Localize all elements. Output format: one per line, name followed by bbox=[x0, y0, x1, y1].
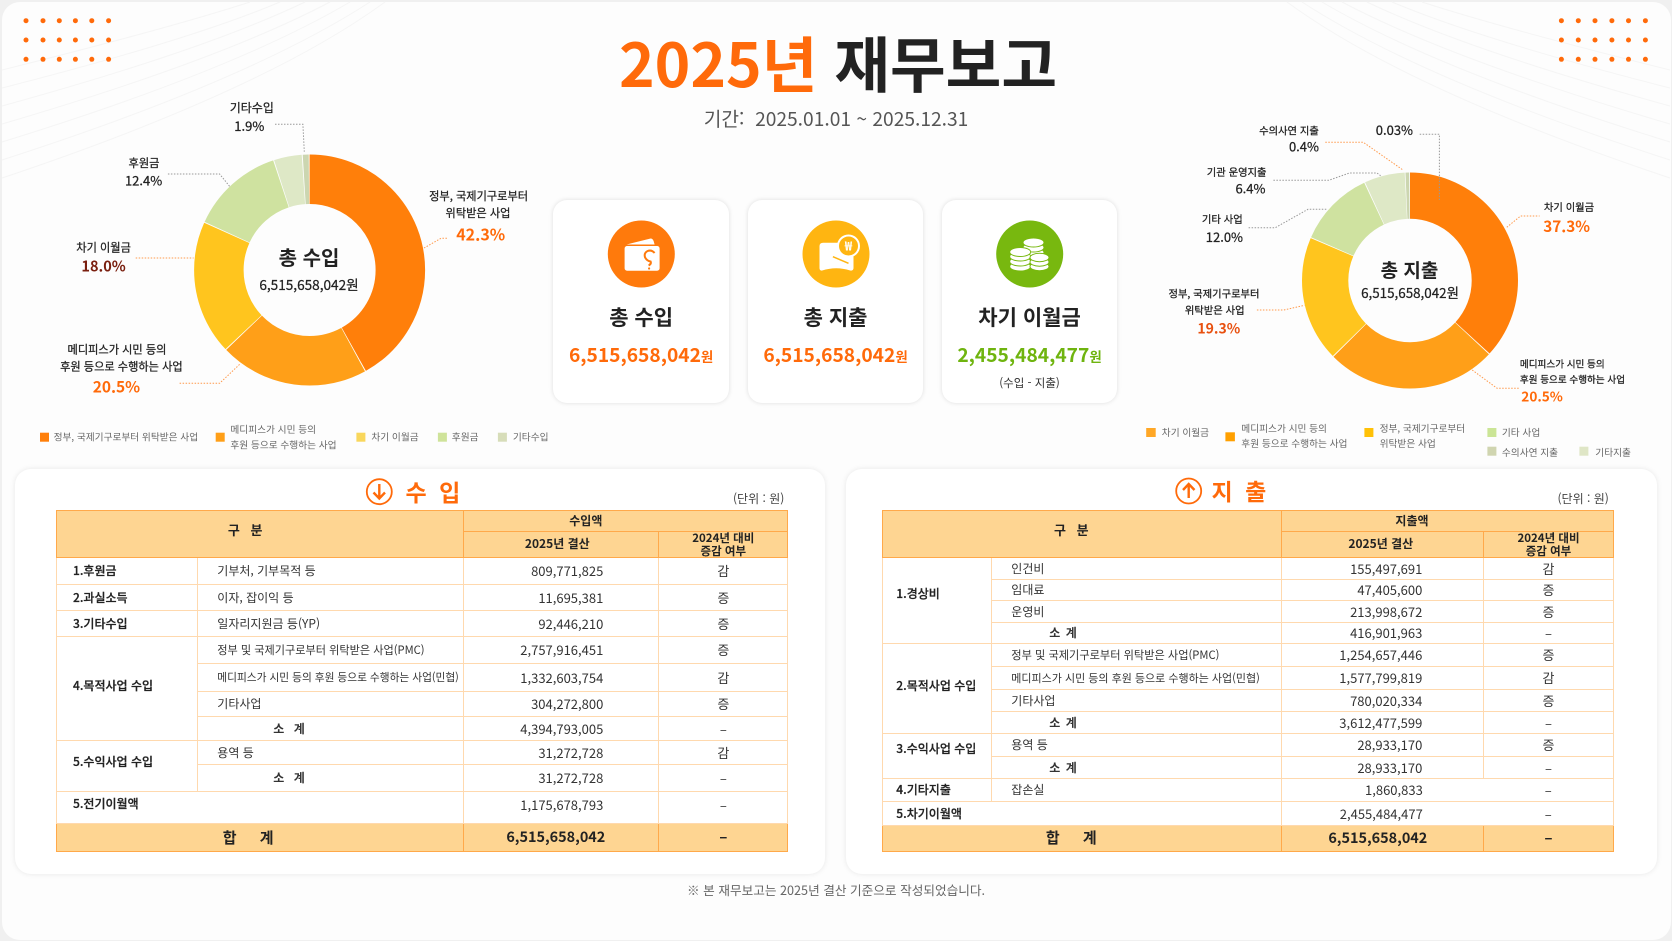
table: income: 이자, 잡이익 등 bbox=[217, 588, 294, 606]
reporting period: 기간: 2025.01.01 ~ 2025.12.31 bbox=[704, 104, 968, 132]
income slice labels: 후원 등으로 수행하는 사업 bbox=[60, 358, 183, 374]
unit note: expense: (단위 : 원) bbox=[1558, 490, 1609, 507]
expense slice labels: 0.4% bbox=[1289, 136, 1319, 156]
table: income: 3.기타수입 bbox=[73, 614, 128, 632]
table: expense: 2,455,484,477 bbox=[1340, 804, 1423, 822]
table: expense: 증 bbox=[1542, 602, 1554, 620]
table: income: 용역 등 bbox=[217, 744, 254, 760]
table: expense: 28,933,170 bbox=[1357, 735, 1422, 754]
table: income: 2,757,916,451 bbox=[520, 640, 603, 659]
table: expense: 213,998,672 bbox=[1350, 602, 1422, 620]
table: expense: – bbox=[1545, 804, 1552, 822]
table: expense: 메디피스가 시민 등의 후원 등으로 수행하는 사업(민협) bbox=[1011, 670, 1260, 686]
income leader lines bbox=[136, 124, 448, 383]
income slice labels bbox=[60, 99, 528, 398]
expense slice labels: 19.3% bbox=[1197, 318, 1241, 338]
table: expense: 기타사업 bbox=[1011, 692, 1055, 708]
income slice labels: 기타수입 bbox=[230, 99, 274, 116]
table: income: 소 계 bbox=[273, 720, 305, 736]
summary card: total income: 6,515,658,042원 bbox=[569, 340, 713, 368]
dot pattern top right bbox=[1559, 18, 1648, 62]
table: income: 31,272,728 bbox=[538, 768, 603, 787]
panel: income table bbox=[15, 469, 825, 874]
table: expense: – bbox=[1545, 758, 1552, 776]
income slice labels: 차기 이월금 bbox=[76, 240, 131, 256]
table: expense: 1,577,799,819 bbox=[1339, 668, 1422, 687]
table: income: 정부 및 국제기구로부터 위탁받은 사업(PMC) bbox=[217, 642, 425, 658]
expense slice labels: 메디피스가 시민 등의 bbox=[1520, 356, 1605, 370]
table: income: 5.전기이월액 bbox=[73, 795, 139, 812]
expense slice labels: 6.4% bbox=[1235, 178, 1266, 198]
table: expense: 2025년 결산 bbox=[1348, 535, 1413, 552]
dot pattern top left bbox=[24, 18, 111, 62]
table: income: 2024년 대비 bbox=[692, 530, 754, 546]
summary card: total income bbox=[553, 200, 729, 403]
expense slice labels bbox=[1168, 120, 1625, 406]
table: income: 증감 여부 bbox=[701, 542, 746, 558]
table: income: 809,771,825 bbox=[531, 561, 603, 580]
table: expense: 증 bbox=[1542, 645, 1554, 664]
table: income: 기타사업 bbox=[217, 695, 261, 712]
expense slice labels: 20.5% bbox=[1521, 386, 1563, 406]
income legend: 메디피스가 시민 등의 bbox=[230, 422, 316, 436]
table: income: 증 bbox=[717, 694, 729, 713]
table: expense: 2024년 대비 bbox=[1517, 530, 1580, 546]
expense donut centre label bbox=[1361, 256, 1459, 302]
icon: coin stacks bbox=[996, 220, 1064, 288]
expense slice labels: 0.03% bbox=[1376, 120, 1413, 139]
income slice labels: 메디피스가 시민 등의 bbox=[68, 342, 166, 358]
table: income: – bbox=[719, 826, 727, 847]
icon: wallet with won coin bbox=[802, 220, 870, 288]
unit note: income: (단위 : 원) bbox=[733, 490, 784, 507]
table: expense: 47,405,600 bbox=[1357, 580, 1422, 599]
expense donut chart bbox=[1146, 120, 1631, 459]
expense legend: 수의사연 지출 bbox=[1502, 445, 1558, 459]
table: expense: 감 bbox=[1542, 558, 1554, 578]
income slice labels: 18.0% bbox=[81, 256, 126, 276]
table: income bbox=[56, 510, 788, 852]
table: income: 증 bbox=[717, 588, 729, 606]
expense donut centre label: 총 지출 bbox=[1381, 256, 1438, 283]
expense legend: 후원 등으로 수행하는 사업 bbox=[1241, 436, 1347, 450]
expense legend: 기타 사업 bbox=[1502, 425, 1540, 439]
expense slice labels: 37.3% bbox=[1543, 215, 1590, 237]
income legend: 차기 이월금 bbox=[371, 430, 419, 444]
summary card: carry-over bbox=[942, 200, 1117, 403]
table: expense: 임대료 bbox=[1011, 581, 1044, 598]
income slice labels: 후원금 bbox=[129, 155, 159, 171]
summary card: total income: 총 수입 bbox=[609, 302, 673, 332]
table: income: 수입액 bbox=[569, 512, 602, 529]
table: income: 2.과실소득 bbox=[73, 588, 128, 606]
expense legend: 기타지출 bbox=[1595, 445, 1631, 459]
table: income: 1.후원금 bbox=[73, 562, 117, 579]
income legend: 후원금 bbox=[452, 430, 479, 444]
expense slice labels: 기관 운영지출 bbox=[1207, 164, 1266, 179]
expense legend: 정부, 국제기구로부터 bbox=[1380, 421, 1465, 435]
table: income: – bbox=[720, 718, 727, 738]
table: expense: 용역 등 bbox=[1011, 736, 1048, 753]
table: income: 메디피스가 시민 등의 후원 등으로 수행하는 사업(민협) bbox=[217, 670, 459, 684]
table: expense: 소 계 bbox=[1049, 758, 1077, 776]
table: income: 4.목적사업 수입 bbox=[73, 676, 153, 694]
table: income: 증 bbox=[717, 640, 729, 659]
expense slice labels: 수의사연 지출 bbox=[1259, 122, 1319, 138]
table: expense: 4.기타지출 bbox=[896, 781, 951, 798]
table: income: 합 계 bbox=[223, 827, 274, 848]
icon: down arrow bbox=[366, 478, 393, 506]
table: income: 감 bbox=[717, 561, 729, 580]
table: expense: – bbox=[1544, 827, 1553, 848]
table: expense: 416,901,963 bbox=[1350, 623, 1422, 642]
table: expense: – bbox=[1545, 623, 1552, 642]
income slice labels: 20.5% bbox=[93, 376, 140, 398]
table: expense: 증 bbox=[1542, 735, 1554, 754]
table: expense: – bbox=[1545, 780, 1552, 799]
table: income: 1,175,678,793 bbox=[520, 794, 603, 814]
table: income: 증 bbox=[717, 614, 729, 632]
expense legend: 메디피스가 시민 등의 bbox=[1241, 421, 1327, 435]
heading: income: 수 입 bbox=[406, 474, 460, 508]
panel: expense table bbox=[846, 469, 1657, 874]
income slice labels: 1.9% bbox=[234, 116, 264, 135]
table: expense: 28,933,170 bbox=[1357, 758, 1422, 776]
table: income: 4,394,793,005 bbox=[520, 718, 603, 738]
table: expense: 증 bbox=[1542, 690, 1554, 710]
summary card: total expense: 6,515,658,042원 bbox=[763, 340, 908, 368]
table: expense: 3.수익사업 수입 bbox=[896, 740, 976, 756]
expense slice labels: 12.0% bbox=[1206, 227, 1243, 246]
income donut centre label bbox=[259, 242, 359, 294]
table: income: 11,695,381 bbox=[538, 588, 603, 606]
table: income: 304,272,800 bbox=[531, 694, 603, 713]
table: expense: 인건비 bbox=[1011, 560, 1044, 576]
table: expense: 증감 여부 bbox=[1526, 542, 1571, 558]
table: income: 감 bbox=[717, 742, 729, 762]
icon: wallet bbox=[608, 220, 675, 288]
income legend bbox=[40, 422, 549, 452]
table: expense: 정부 및 국제기구로부터 위탁받은 사업(PMC) bbox=[1011, 647, 1219, 663]
table: income: 기부처, 기부목적 등 bbox=[217, 562, 316, 579]
summary card: total expense bbox=[748, 200, 923, 403]
expense legend: 위탁받은 사업 bbox=[1380, 436, 1436, 450]
table: expense: 잡손실 bbox=[1011, 781, 1044, 798]
table: income: 5.수익사업 수입 bbox=[73, 753, 153, 770]
table: income: 2025년 결산 bbox=[525, 535, 590, 552]
table: expense: 지출액 bbox=[1395, 512, 1429, 529]
income legend: 후원 등으로 수행하는 사업 bbox=[230, 438, 337, 452]
expense slice labels: 차기 이월금 bbox=[1544, 199, 1594, 214]
table: income: 일자리지원금 등(YP) bbox=[217, 614, 320, 632]
table: income: 31,272,728 bbox=[538, 742, 603, 762]
expense donut centre label: 6,515,658,042원 bbox=[1361, 282, 1459, 302]
summary card: carry-over: (수입 - 지출) bbox=[999, 375, 1060, 391]
table: income: 소 계 bbox=[273, 769, 305, 786]
table: expense: 1,254,657,446 bbox=[1339, 645, 1422, 664]
icon: up arrow bbox=[1175, 478, 1202, 504]
expense slice labels: 위탁받은 사업 bbox=[1185, 302, 1245, 317]
expense legend bbox=[1146, 421, 1631, 459]
table: expense: 2.목적사업 수입 bbox=[896, 676, 976, 694]
table: expense: 3,612,477,599 bbox=[1339, 712, 1422, 732]
table: expense: 소 계 bbox=[1049, 714, 1077, 730]
table: expense: 감 bbox=[1542, 668, 1554, 687]
table: income: – bbox=[720, 794, 727, 814]
table: income: 6,515,658,042 bbox=[506, 826, 605, 847]
table: income: – bbox=[720, 768, 727, 787]
summary card: total expense: 총 지출 bbox=[804, 302, 867, 332]
table: expense: 증 bbox=[1542, 580, 1554, 599]
footnote: ※ 본 재무보고는 2025년 결산 기준으로 작성되었습니다. bbox=[687, 880, 985, 899]
income slice labels: 정부, 국제기구로부터 bbox=[429, 188, 528, 204]
summary card: carry-over: 2,455,484,477원 bbox=[957, 340, 1102, 368]
table: income: 구 분 bbox=[228, 520, 262, 539]
income legend: 기타수입 bbox=[513, 430, 549, 444]
table: income: 1,332,603,754 bbox=[520, 668, 603, 686]
table: expense: 155,497,691 bbox=[1350, 558, 1422, 578]
table: expense: – bbox=[1545, 712, 1552, 732]
income slice labels: 42.3% bbox=[456, 222, 505, 246]
summary card: carry-over: 차기 이월금 bbox=[978, 302, 1081, 332]
income donut centre label: 총 수입 bbox=[279, 242, 339, 271]
table: expense: 5.차기이월액 bbox=[896, 804, 962, 822]
table: expense: 1,860,833 bbox=[1365, 780, 1423, 799]
table: expense: 구 분 bbox=[1054, 520, 1089, 539]
income slice labels: 위탁받은 사업 bbox=[446, 205, 510, 221]
table: expense: 소 계 bbox=[1049, 624, 1077, 641]
table: income: 감 bbox=[717, 668, 729, 686]
income donut chart bbox=[40, 99, 549, 452]
heading: expense: 지 출 bbox=[1212, 473, 1266, 507]
income donut centre label: 6,515,658,042원 bbox=[259, 274, 359, 294]
table: expense bbox=[882, 510, 1614, 852]
table: expense: 780,020,334 bbox=[1350, 690, 1422, 710]
table: expense: 합 계 bbox=[1046, 827, 1097, 848]
expense slice labels: 후원 등으로 수행하는 사업 bbox=[1520, 372, 1625, 386]
expense legend: 차기 이월금 bbox=[1162, 425, 1209, 439]
expense slice labels: 기타 사업 bbox=[1202, 211, 1243, 226]
table: expense: 운영비 bbox=[1011, 602, 1044, 620]
income slice labels: 12.4% bbox=[125, 170, 162, 190]
table: expense: 1.경상비 bbox=[896, 585, 940, 602]
table: expense: 6,515,658,042 bbox=[1328, 827, 1427, 848]
expense leader lines bbox=[1249, 134, 1540, 388]
expense slice labels: 정부, 국제기구로부터 bbox=[1168, 286, 1260, 300]
icon: wallet with won coin: ₩ bbox=[844, 236, 853, 254]
table: income: 92,446,210 bbox=[538, 614, 603, 632]
title: 2025년 재무보고 bbox=[619, 18, 1057, 105]
income legend: 정부, 국제기구로부터 위탁받은 사업 bbox=[54, 430, 198, 444]
